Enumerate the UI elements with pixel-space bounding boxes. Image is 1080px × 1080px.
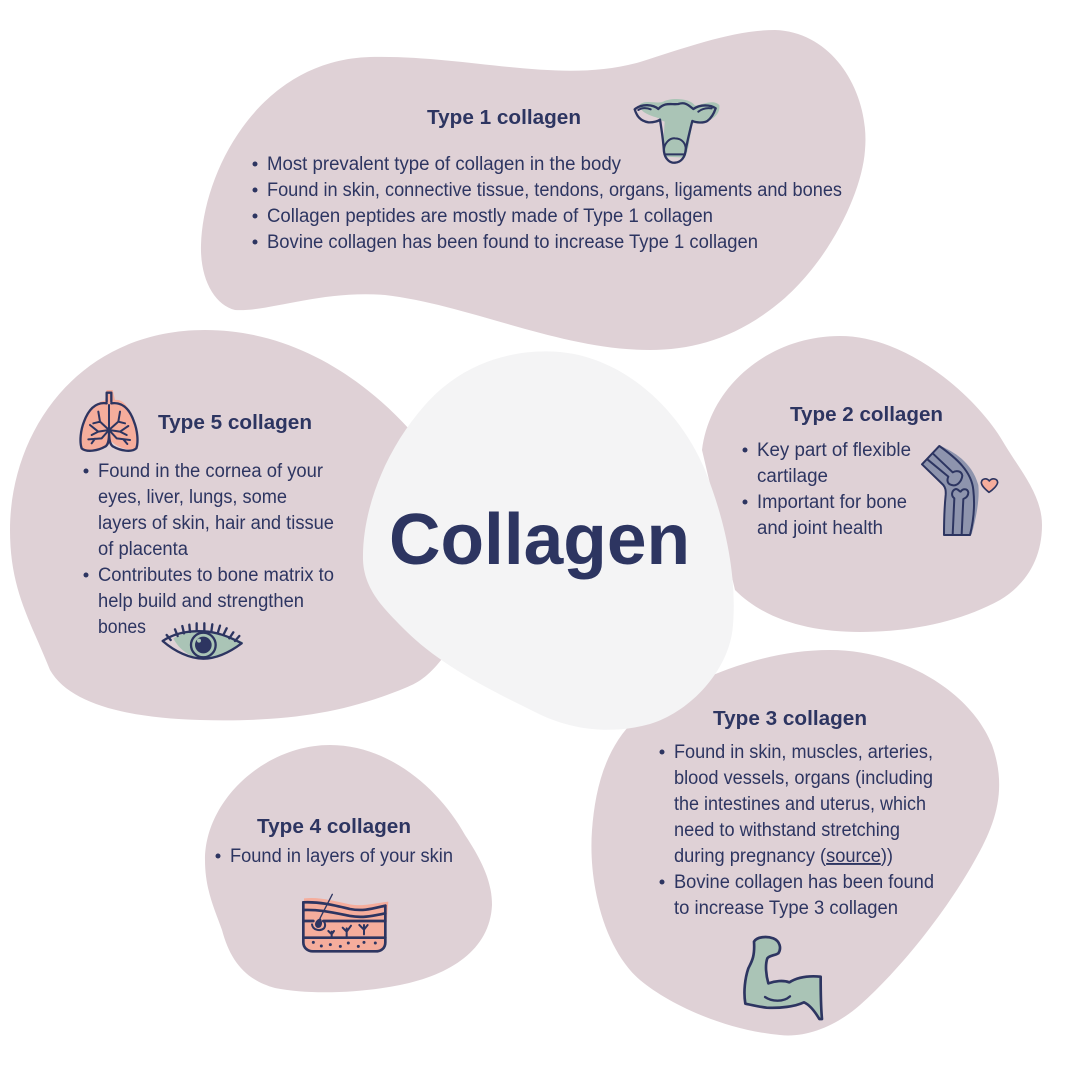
list: type 2 facts: cartilage [757, 466, 828, 487]
panel: type 2 collagen [702, 336, 1042, 632]
heading: type 1: Type 1 collagen [427, 107, 581, 129]
list: type 5 facts: Contributes to bone matrix to [98, 565, 334, 586]
list: type 2 facts: Key part of flexible [757, 440, 911, 461]
title: Collagen [389, 500, 690, 580]
heading: type 4: Type 4 collagen [257, 816, 411, 838]
list: type 5 facts: Found in the cornea of your [98, 461, 324, 482]
list: type 5 facts [84, 461, 334, 638]
icon: eye [163, 623, 243, 659]
list: type 5 facts: of placenta [98, 539, 188, 560]
list: type 1 facts: Found in skin, connective tissue, tendons, organs, ligaments and bones [267, 180, 842, 201]
panel: center collagen blob [363, 351, 734, 730]
panel: type 3 collagen [591, 650, 999, 1035]
list: type 3 facts: the intestines and uterus, which [674, 794, 926, 815]
list: type 1 facts: Collagen peptides are mostly made of Type 1 collagen [267, 206, 713, 227]
list: type 1 facts: Most prevalent type of collagen in the body [267, 154, 621, 175]
icon: flexed arm muscle [744, 937, 822, 1019]
icon: lungs [80, 390, 138, 452]
panel: type 5 collagen [10, 330, 445, 720]
icon: cow head [635, 99, 719, 163]
list: type 3 facts: during pregnancy (source)) [674, 846, 893, 867]
heading: type 2: Type 2 collagen [790, 404, 943, 426]
panel: type 1 collagen [201, 30, 865, 350]
list: type 5 facts: eyes, liver, lungs, some [98, 487, 287, 508]
list: type 4 facts: Found in layers of your skin [230, 846, 453, 867]
heading: type 3: Type 3 collagen [713, 708, 867, 730]
list: type 2 facts [742, 440, 911, 539]
list: type 1 facts: Bovine collagen has been found to increase Type 1 collagen [267, 232, 758, 253]
heading: type 5: Type 5 collagen [158, 412, 312, 434]
panel: type 4 collagen [205, 745, 492, 992]
list: type 2 facts: Important for bone [757, 492, 907, 513]
icon: skin layers [303, 894, 388, 951]
list: type 3 facts [660, 742, 934, 919]
list: type 3 facts: Found in skin, muscles, arteries, [674, 742, 933, 763]
list: type 5 facts: layers of skin, hair and tissue [98, 513, 334, 534]
list: type 3 facts: to increase Type 3 collagen [674, 898, 898, 919]
list: type 3 facts: blood vessels, organs (including [674, 768, 933, 789]
list: type 5 facts: bones [98, 617, 146, 638]
list: type 3 facts: need to withstand stretching [674, 820, 900, 841]
list: type 3 facts: Bovine collagen has been found [674, 872, 934, 893]
list: type 1 facts [252, 154, 842, 253]
icon: knee joint with heart [922, 446, 998, 535]
list: type 2 facts: and joint health [757, 518, 883, 539]
list: type 5 facts: help build and strengthen [98, 591, 304, 612]
